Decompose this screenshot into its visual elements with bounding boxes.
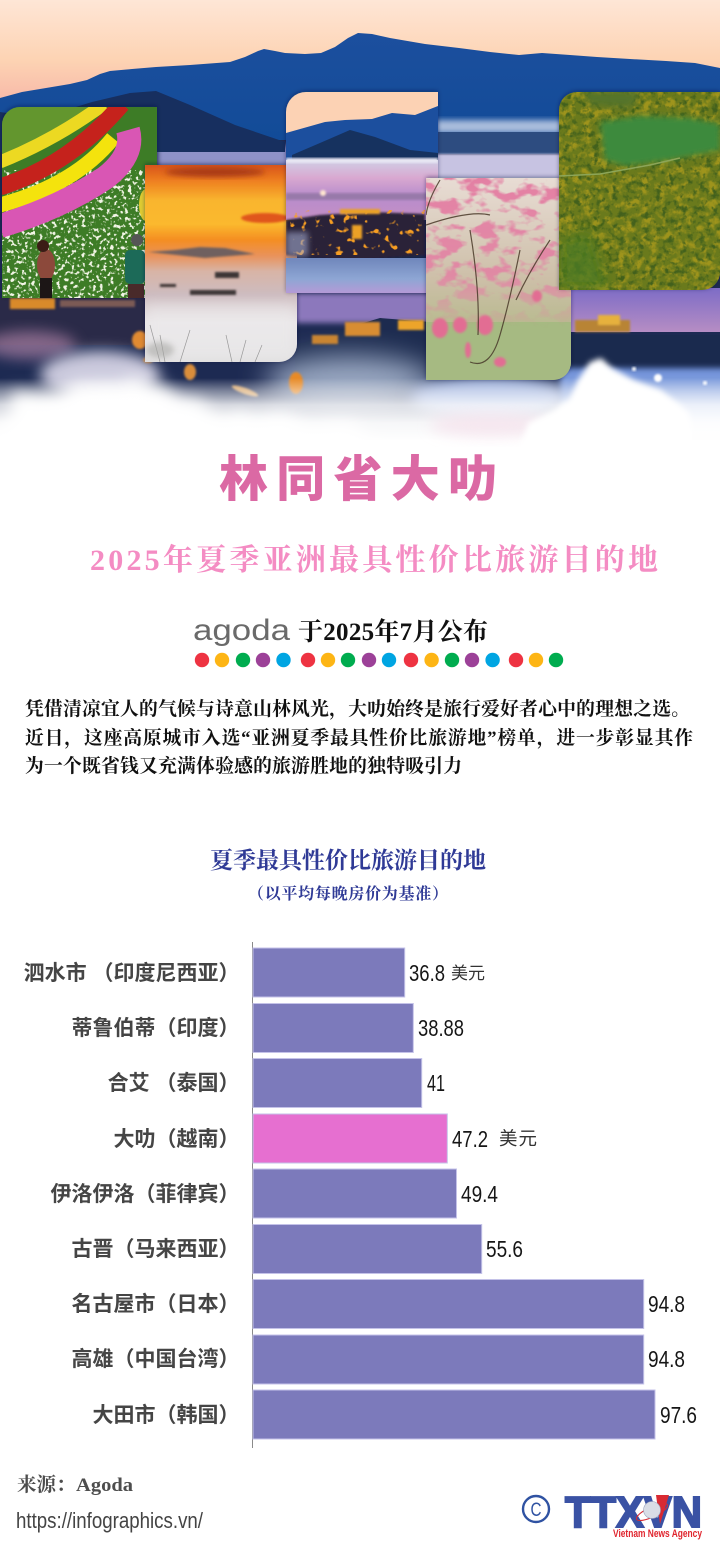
sky	[0, 0, 720, 98]
price values: 47.2	[452, 1126, 488, 1152]
price values: 美元	[499, 1128, 537, 1149]
TTXVN logo: TTXVN	[565, 1488, 702, 1537]
price values: 41	[427, 1070, 445, 1096]
blue mountain range	[0, 33, 720, 140]
source line	[17, 1474, 134, 1496]
published date: 于2025年7月公布	[298, 617, 488, 646]
destination labels: 伊洛伊洛（菲律宾）	[50, 1183, 240, 1206]
price values: 49.4	[461, 1181, 498, 1207]
agoda publication line	[193, 614, 488, 647]
copyright mark	[523, 1496, 549, 1522]
chart title: 夏季最具性价比旅游目的地	[210, 848, 486, 873]
destination labels: 高雄（中国台湾）	[72, 1347, 240, 1371]
price values: 美元	[451, 964, 485, 983]
copyright mark: C	[530, 1500, 542, 1521]
price values: 94.8	[648, 1346, 685, 1372]
intro paragraph: 近日，这座高原城市入选“亚洲夏季最具性价比旅游地”榜单，进一步彰显其作	[25, 726, 693, 749]
destination labels: 古晋（马来西亚）	[72, 1238, 240, 1261]
price values: 97.6	[660, 1402, 697, 1428]
source line: 来源：	[17, 1474, 76, 1496]
photo: wild sunflower hills	[559, 92, 720, 290]
intro paragraph	[25, 697, 693, 777]
axis line	[252, 942, 253, 1448]
destination labels: 大叻（越南）	[114, 1128, 240, 1151]
price values: 94.8	[648, 1291, 685, 1317]
intro paragraph: 为一个既省钱又充满体验感的旅游胜地的独特吸引力	[25, 754, 462, 777]
photo: flower garden	[0, 104, 160, 299]
hero: mountain and cloud backdrop	[0, 0, 720, 476]
cloud masses and mist	[0, 354, 720, 441]
bars	[253, 948, 655, 1439]
price values: 36.8	[409, 960, 445, 986]
intro paragraph: 凭借清凉宜人的气候与诗意山林风光，大叻始终是旅行爱好者心中的理想之选。	[25, 697, 690, 720]
destination labels: 蒂鲁伯蒂（印度）	[72, 1017, 240, 1040]
source line: Agoda	[76, 1475, 134, 1496]
title: 林同省大叻	[219, 440, 497, 511]
dark foreground hill	[0, 91, 285, 152]
destination labels	[24, 961, 240, 1427]
photo: foggy town at night	[286, 92, 438, 293]
destination labels: 名古屋市（日本）	[72, 1292, 240, 1316]
town lights	[10, 298, 630, 399]
row of coloured dots	[195, 653, 563, 667]
website: https://infographics.vn/	[16, 1508, 204, 1533]
subtitle: 2025年夏季亚洲最具性价比旅游目的地	[90, 544, 658, 577]
destination labels: 合艾 （泰国）	[108, 1072, 240, 1095]
chart subtitle: （以平均每晚房价为基准）	[248, 884, 448, 903]
price values: 38.88	[418, 1015, 464, 1041]
photo: sunset over the fog	[145, 165, 297, 362]
photo: cherry blossoms	[426, 178, 571, 380]
lower valley backdrop	[0, 120, 720, 440]
destination labels: 大田市（韩国）	[92, 1403, 240, 1427]
price values: 55.6	[486, 1236, 523, 1262]
destination labels: 泗水市 （印度尼西亚）	[24, 961, 240, 985]
haze over the town	[0, 331, 720, 438]
price values	[409, 960, 697, 1428]
agoda wordmark: agoda	[193, 614, 290, 647]
bar chart	[24, 942, 697, 1448]
